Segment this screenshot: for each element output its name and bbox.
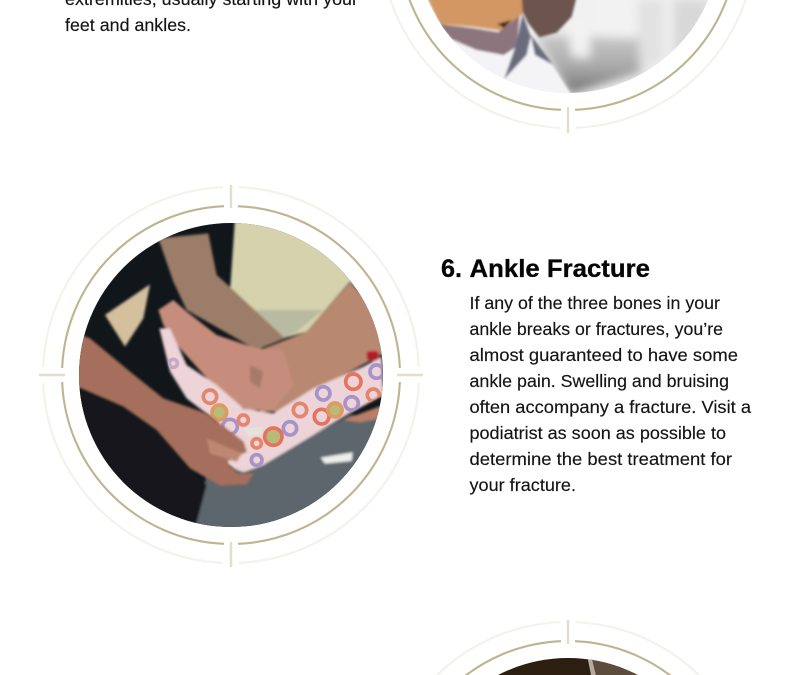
section 5 closing text: feet and ankles. <box>65 15 191 35</box>
metal clip <box>243 427 263 437</box>
near forearm and hand <box>73 332 254 486</box>
background forearm <box>158 233 285 350</box>
section 6 body text <box>470 293 751 495</box>
section 6 photo: foot resting in a patterned splint <box>73 218 390 535</box>
section 6 body text: determine the best treatment for <box>470 449 732 469</box>
paper <box>321 452 353 464</box>
section 6 heading: 6. <box>441 255 462 283</box>
section 6 body text: ankle breaks or fractures, you’re <box>470 319 723 339</box>
window shape <box>105 284 150 347</box>
section 7 photo: top edge <box>498 658 638 675</box>
wall <box>228 223 356 340</box>
section 5 decorative ring <box>381 0 755 133</box>
trousers <box>80 390 208 524</box>
shin <box>260 282 387 412</box>
section 7 decorative ring <box>380 620 756 675</box>
section 6 body text: often accompany a fracture. Visit a <box>470 397 751 417</box>
section 6 body text: ankle pain. Swelling and bruising <box>470 371 729 391</box>
foot <box>158 300 293 410</box>
splint pattern <box>169 359 383 465</box>
section 6 body text: podiatrist as soon as possible to <box>470 423 726 443</box>
section 6 body text: your fracture. <box>470 475 576 495</box>
section 6 decorative ring <box>39 185 423 567</box>
red marker <box>367 351 379 360</box>
floor <box>193 415 390 535</box>
section 6 body text: almost guaranteed to have some <box>470 345 738 365</box>
splint <box>159 328 383 472</box>
section 5 closing text <box>65 0 358 35</box>
section 6 body text: If any of the three bones in your <box>470 293 720 313</box>
section 5 photo: podiatrist examining a foot <box>428 0 708 93</box>
far hand <box>343 405 383 422</box>
section 6 heading: Ankle Fracture <box>470 255 650 283</box>
